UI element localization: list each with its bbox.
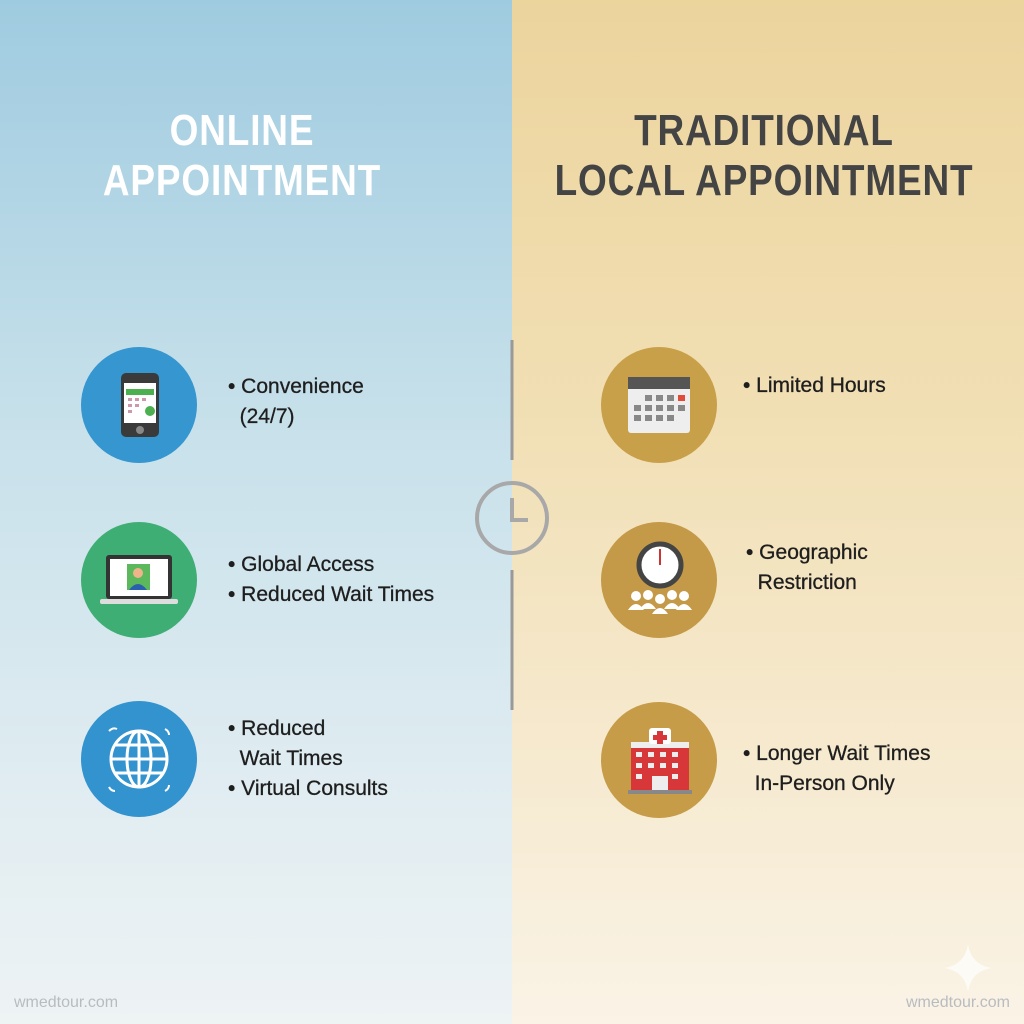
icon: sparkle	[945, 945, 991, 991]
icon: hospital	[601, 702, 717, 818]
title: traditional: TRADITIONAL	[634, 106, 894, 155]
title: online: APPOINTMENT	[103, 156, 381, 205]
title: online: ONLINE	[170, 106, 314, 155]
text: reduced wait times: • Virtual Consults	[228, 777, 388, 800]
text: convenience: (24/7)	[240, 405, 295, 428]
icon: laptop video	[81, 522, 197, 638]
title: online	[103, 106, 381, 205]
center divider and clock	[475, 340, 549, 710]
text: global access: • Reduced Wait Times	[228, 583, 434, 606]
text: global access: • Global Access	[228, 553, 374, 576]
text: convenience: • Convenience	[228, 375, 364, 398]
title: traditional: LOCAL APPOINTMENT	[555, 156, 973, 205]
icon: calendar	[601, 347, 717, 463]
watermark left: wmedtour.com	[14, 994, 118, 1011]
icon: globe	[81, 701, 197, 817]
text: limited hours: • Limited Hours	[743, 374, 886, 397]
text: convenience	[228, 375, 364, 428]
text: reduced wait times: • Reduced	[228, 717, 325, 740]
icon: clock and people	[601, 522, 717, 638]
text: geographic restriction	[746, 541, 868, 594]
text: geographic restriction: Restriction	[758, 571, 857, 594]
watermark right: wmedtour.com	[906, 994, 1010, 1011]
text: longer wait times: • Longer Wait Times	[743, 742, 930, 765]
text: longer wait times: In-Person Only	[755, 772, 895, 795]
title: traditional	[555, 106, 973, 205]
text: reduced wait times: Wait Times	[240, 747, 343, 770]
icon: phone calendar	[81, 347, 197, 463]
text: global access	[228, 553, 434, 606]
text: geographic restriction: • Geographic	[746, 541, 868, 564]
text: reduced wait times	[228, 717, 388, 800]
text: longer wait times	[743, 742, 930, 795]
